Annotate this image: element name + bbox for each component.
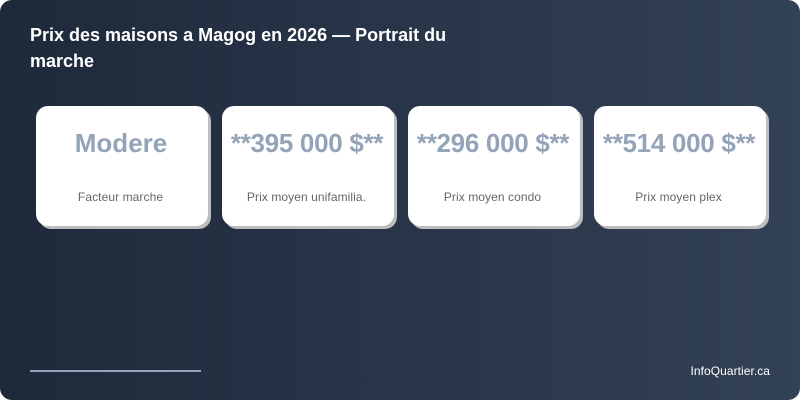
value: 514 000 $: **514 000 $** bbox=[603, 128, 755, 158]
value: 296 000 $: **296 000 $** bbox=[417, 128, 569, 158]
card: prix moyen condo bbox=[408, 106, 580, 226]
value: 395 000 $: **395 000 $** bbox=[231, 128, 383, 158]
label: prix moyen condo: Prix moyen condo bbox=[444, 190, 541, 204]
label: prix moyen plex: Prix moyen plex bbox=[635, 190, 722, 204]
card: prix moyen unifamilial bbox=[222, 106, 394, 226]
card: prix moyen plex bbox=[594, 106, 766, 226]
card: facteur marche bbox=[36, 106, 208, 226]
title: Prix des maisons a Magog en 2026 — Portrait du marche bbox=[30, 25, 446, 71]
label: facteur marche: Facteur marche bbox=[78, 190, 163, 204]
footer accent line bbox=[30, 370, 201, 372]
brand: InfoQuartier.ca: InfoQuartier.ca bbox=[691, 364, 770, 378]
label: prix moyen unifamilia.: Prix moyen unifamilia. bbox=[247, 190, 366, 204]
value: modere: Modere bbox=[75, 128, 167, 158]
